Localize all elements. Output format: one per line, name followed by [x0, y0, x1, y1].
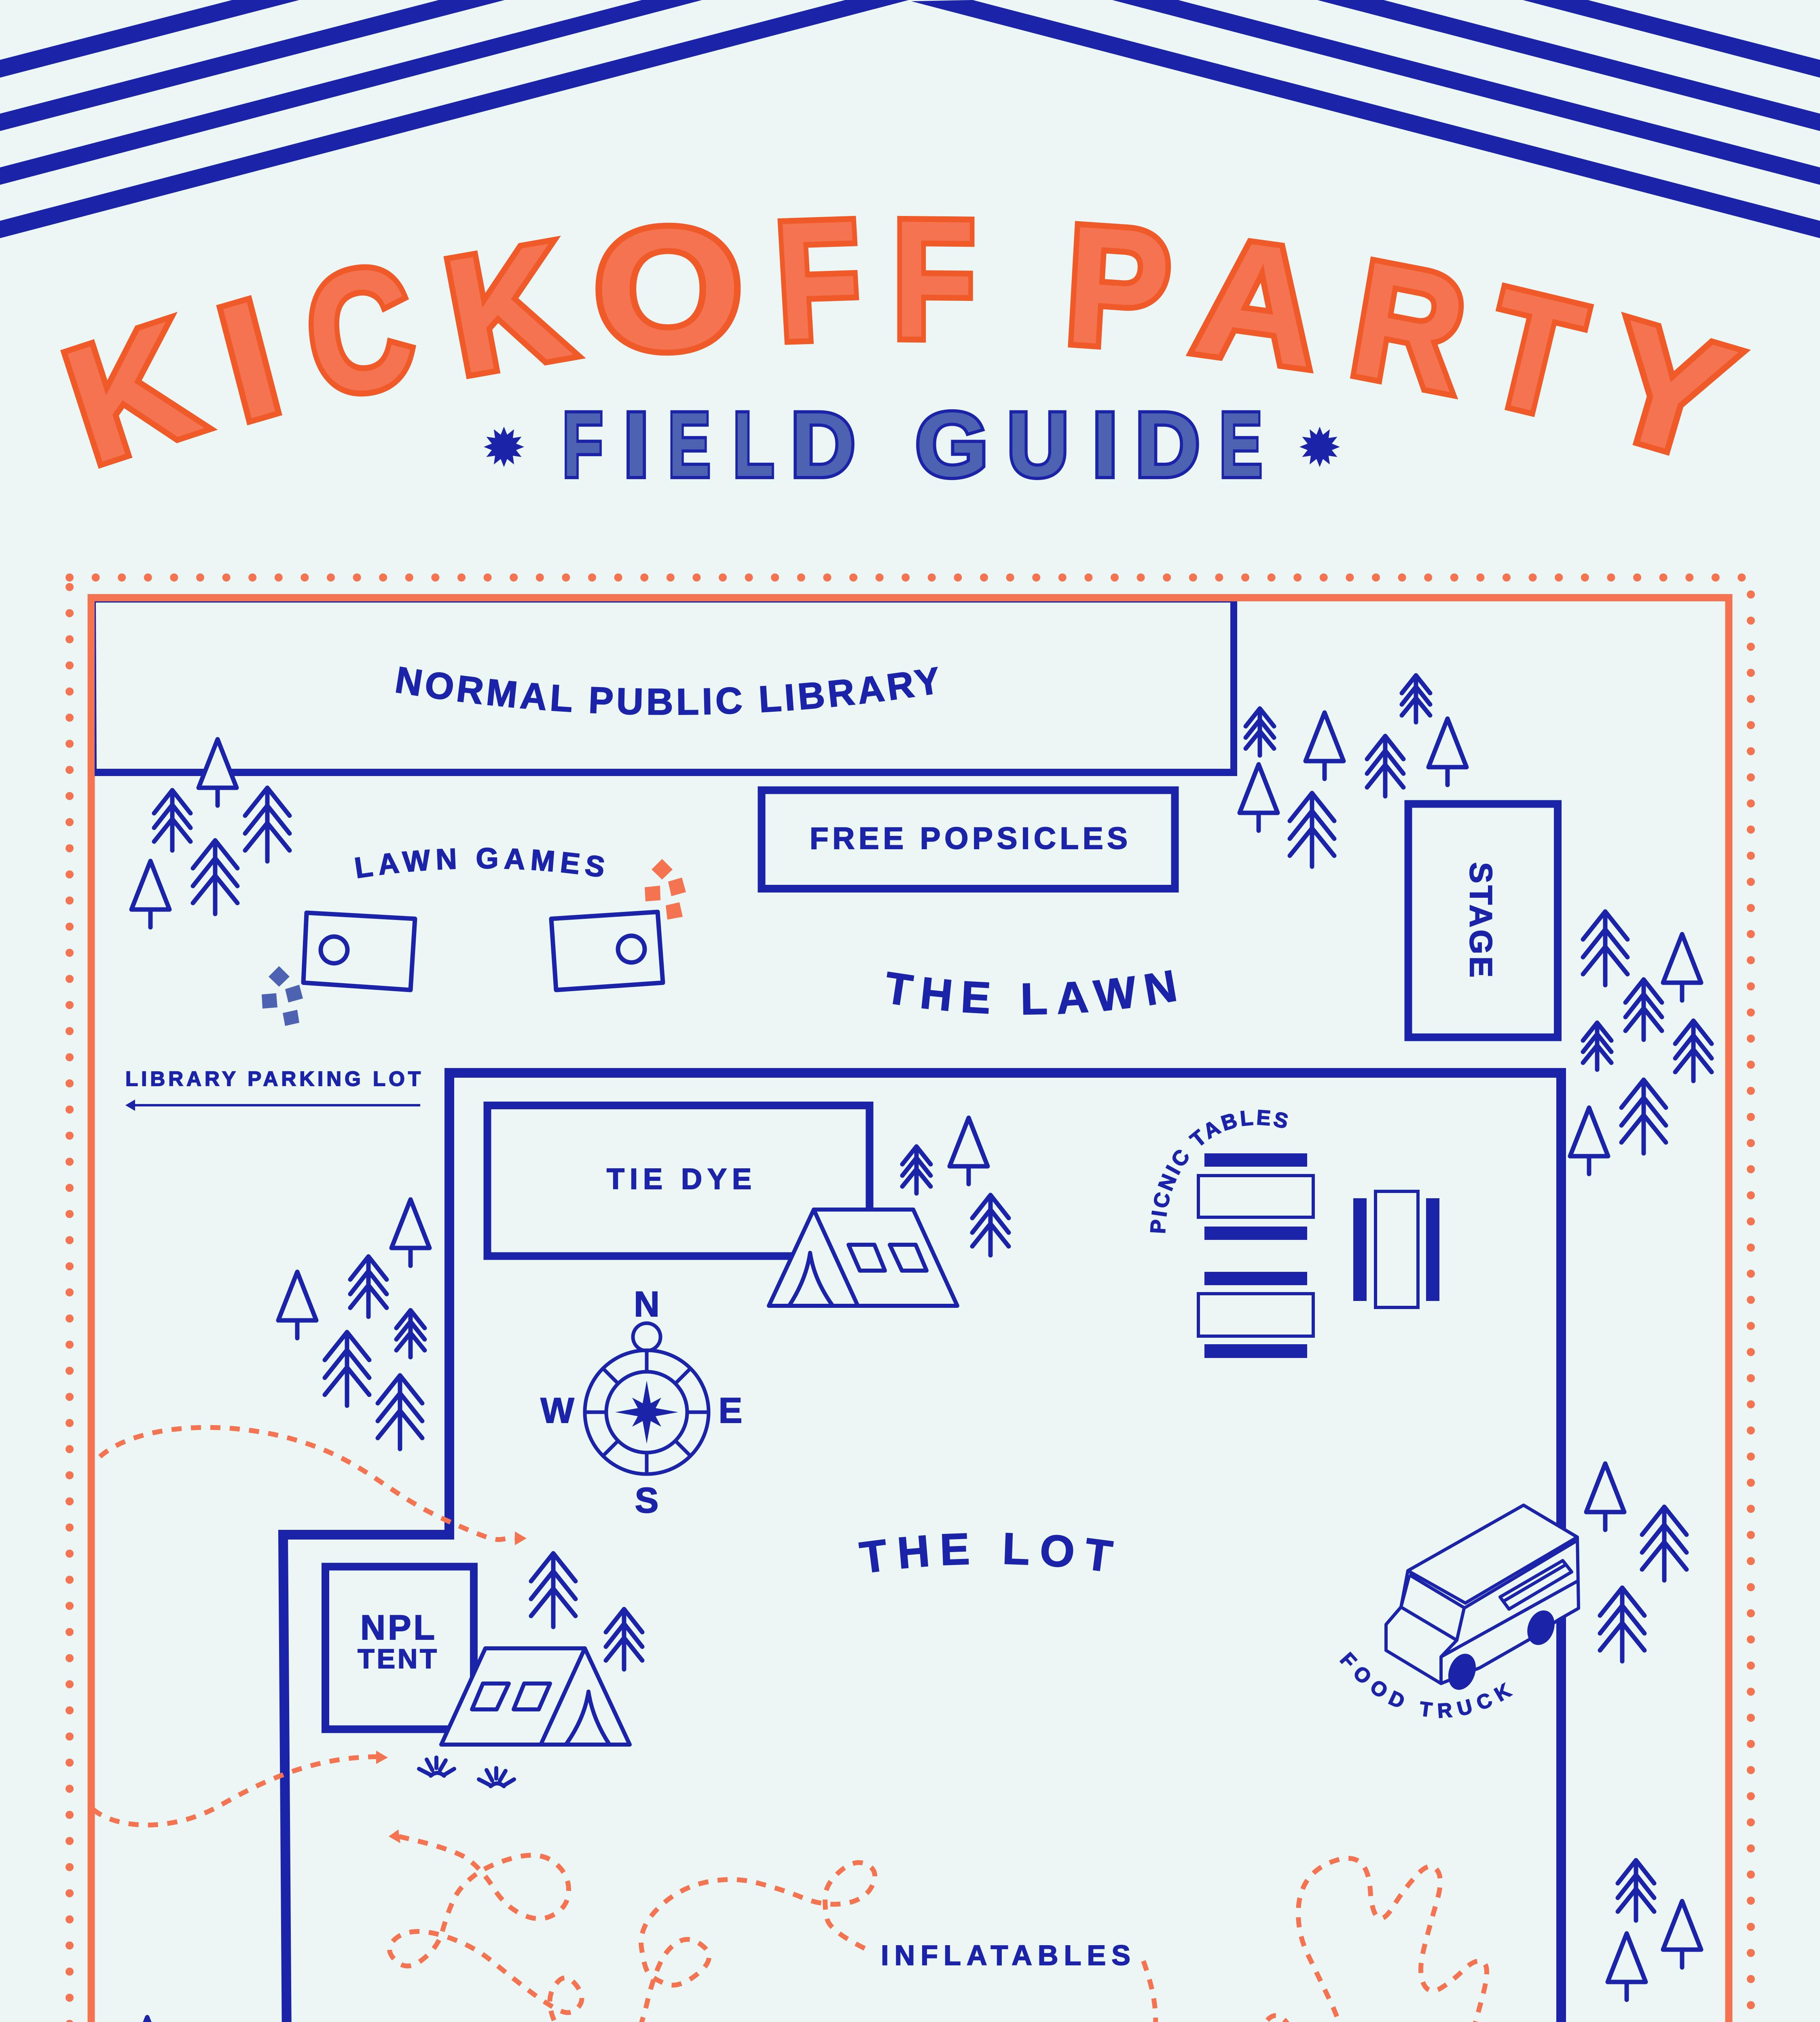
compass letters: E [719, 1390, 742, 1430]
compass dial [585, 1323, 709, 1474]
box: Stage [1408, 804, 1558, 1037]
subtitle: Field Guide: I [624, 394, 649, 495]
subtitle: Field Guide: D [1135, 394, 1200, 496]
title: Kickoff Party: K [433, 208, 581, 409]
title: Kickoff Party: K [46, 286, 217, 498]
label: The Lot: THE LOT [857, 1524, 1125, 1583]
label: NPL Tent: TENT [358, 1643, 439, 1674]
lawn game boards [303, 912, 663, 990]
compass letters: W [540, 1390, 574, 1430]
icon: grass tuft [419, 1758, 454, 1776]
subtitle: Field Guide: F [563, 394, 603, 495]
subtitle: Field Guide: U [1007, 394, 1069, 496]
table tops [1198, 1176, 1418, 1336]
blue bean bags [262, 966, 303, 1026]
parking lot outline [283, 1073, 1561, 2022]
arrow: to parking lot [125, 1100, 420, 1111]
label: Lawn Games: LAWN GAMES [353, 842, 612, 884]
title: Kickoff Party: O [594, 193, 742, 385]
box: NPL Tent [325, 1567, 474, 1729]
compass letters [540, 1284, 742, 1520]
icon: NPL tent [441, 1648, 630, 1745]
map panel [93, 601, 1732, 2022]
subtitle: Field Guide [563, 393, 1262, 496]
subtitle: Field Guide: E [1220, 394, 1262, 496]
trees [128, 675, 1712, 2022]
arrow: inflatables left loop path [389, 1830, 875, 2022]
icon: grass tuft [479, 1768, 514, 1786]
title: Kickoff Party: P [1061, 191, 1175, 384]
label: Stage: STAGE [1463, 862, 1499, 977]
subtitle: Field Guide: L [733, 394, 774, 495]
header chevron stripes [0, 0, 1820, 238]
compass star [615, 1381, 678, 1444]
label: Picnic Tables: PICNIC TABLES [1146, 1106, 1293, 1234]
title: Kickoff Party: C [297, 229, 422, 433]
label: The Lawn: THE LAWN [881, 959, 1189, 1024]
picnic tables [1198, 1153, 1439, 1358]
title: Kickoff Party: T [1470, 255, 1598, 452]
title: Kickoff Party: Y [1585, 285, 1751, 495]
title: Kickoff Party: F [893, 186, 975, 373]
label: Library Parking Lot: LIBRARY PARKING LOT [125, 1067, 421, 1090]
label: Tie Dye: TIE DYE [607, 1163, 751, 1195]
icon: tie dye tent [769, 1210, 957, 1306]
title: Kickoff Party: F [771, 185, 865, 374]
box: Free Popsicles [762, 790, 1175, 889]
label: Food Truck: FOOD TRUCK [1336, 1648, 1521, 1722]
subtitle: Field Guide: G [916, 394, 988, 495]
subtitle: Field Guide: E [669, 393, 710, 495]
orange bean bags [645, 859, 686, 920]
subtitle: Field Guide: D [791, 394, 855, 496]
title: Kickoff Party [46, 185, 1751, 498]
icon: right star burst [1299, 427, 1340, 467]
compass letters: S [635, 1480, 658, 1520]
arrow: path into lot lower [93, 1751, 388, 1825]
label: Free Popsicles: FREE POPSICLES [810, 821, 1128, 856]
arrow: path into lot upper [100, 1428, 527, 1545]
compass [540, 1284, 742, 1520]
icon: food truck [1386, 1505, 1579, 1692]
subtitle: Field Guide: I [1092, 394, 1117, 495]
title: Kickoff Party: I [203, 265, 295, 455]
label: NPL Tent: NPL [360, 1608, 437, 1647]
label: Normal Public Library: NORMAL PUBLIC LIBRARY [392, 659, 946, 723]
dotted outer border [70, 577, 1751, 2022]
compass letters: N [634, 1284, 660, 1324]
map frame [91, 598, 1729, 2022]
building: Normal Public Library [95, 601, 1237, 776]
label: Inflatables: INFLATABLES [881, 1940, 1130, 1971]
title: Kickoff Party: R [1340, 226, 1477, 427]
box: Tie Dye [487, 1106, 870, 1256]
icon: left star burst [484, 427, 524, 467]
benches [1204, 1153, 1439, 1358]
arrow: inflatables right loop path [1045, 1858, 1487, 2022]
title: Kickoff Party: A [1186, 203, 1330, 402]
